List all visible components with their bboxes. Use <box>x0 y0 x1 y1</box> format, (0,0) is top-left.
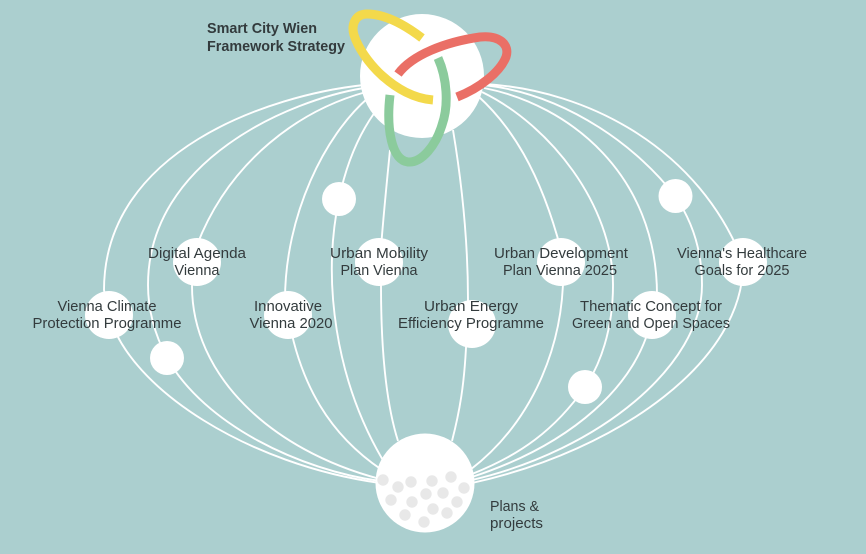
label: Urban Development Plan Vienna 2025 <box>494 245 629 279</box>
label: Vienna Climate Protection Programme <box>32 298 182 332</box>
label: Urban Energy Efficiency Programme: Efficiency Programme <box>398 315 544 332</box>
label: Thematic Concept for Green and Open Spaces <box>572 298 730 332</box>
yellow ring <box>353 14 433 100</box>
label: Urban Energy Efficiency Programme <box>398 298 544 332</box>
label: Urban Energy Efficiency Programme: Urban Energy <box>424 298 518 315</box>
title <box>207 20 346 55</box>
label: Plans and projects <box>490 498 543 532</box>
label: Vienna's Healthcare Goals for 2025: Goals for 2025 <box>694 262 790 279</box>
top circle <box>360 14 484 138</box>
label: Vienna's Healthcare Goals for 2025: Vienna's Healthcare <box>677 245 807 262</box>
label: Digital Agenda Vienna: Digital Agenda <box>148 245 247 262</box>
label: Vienna Climate Protection Programme: Protection Programme <box>32 315 182 332</box>
label: Vienna's Healthcare Goals for 2025 <box>677 245 807 279</box>
label: Thematic Concept for Green and Open Spaces: Thematic Concept for <box>580 298 722 315</box>
label: Innovative Vienna 2020: Innovative <box>254 298 322 315</box>
title: Smart City Wien <box>207 20 317 37</box>
label: Vienna Climate Protection Programme: Vienna Climate <box>58 298 156 315</box>
label: Plans and projects: Plans & <box>490 498 539 515</box>
green ring <box>389 58 446 162</box>
label: Innovative Vienna 2020: Vienna 2020 <box>250 315 332 332</box>
red ring <box>398 37 507 97</box>
title: Framework Strategy <box>207 38 346 55</box>
icon: interlaced rings <box>353 14 507 162</box>
label: Thematic Concept for Green and Open Spaces: Green and Open Spaces <box>572 315 730 332</box>
label: Urban Development Plan Vienna 2025: Plan Vienna 2025 <box>503 262 617 279</box>
label: Urban Development Plan Vienna 2025: Urban Development <box>494 245 629 262</box>
connecting lines <box>104 84 743 483</box>
small unnamed circles <box>150 179 692 404</box>
label: Urban Mobility Plan Vienna: Urban Mobility <box>330 245 429 262</box>
label: Digital Agenda Vienna: Vienna <box>174 262 220 279</box>
label: Digital Agenda Vienna <box>148 245 247 279</box>
node circles <box>85 238 767 348</box>
bottom circle: plans and projects <box>376 434 474 532</box>
label: Urban Mobility Plan Vienna <box>330 245 429 279</box>
label: Innovative Vienna 2020 <box>250 298 332 332</box>
label: Plans and projects: projects <box>490 515 543 532</box>
label: Urban Mobility Plan Vienna: Plan Vienna <box>340 262 418 279</box>
